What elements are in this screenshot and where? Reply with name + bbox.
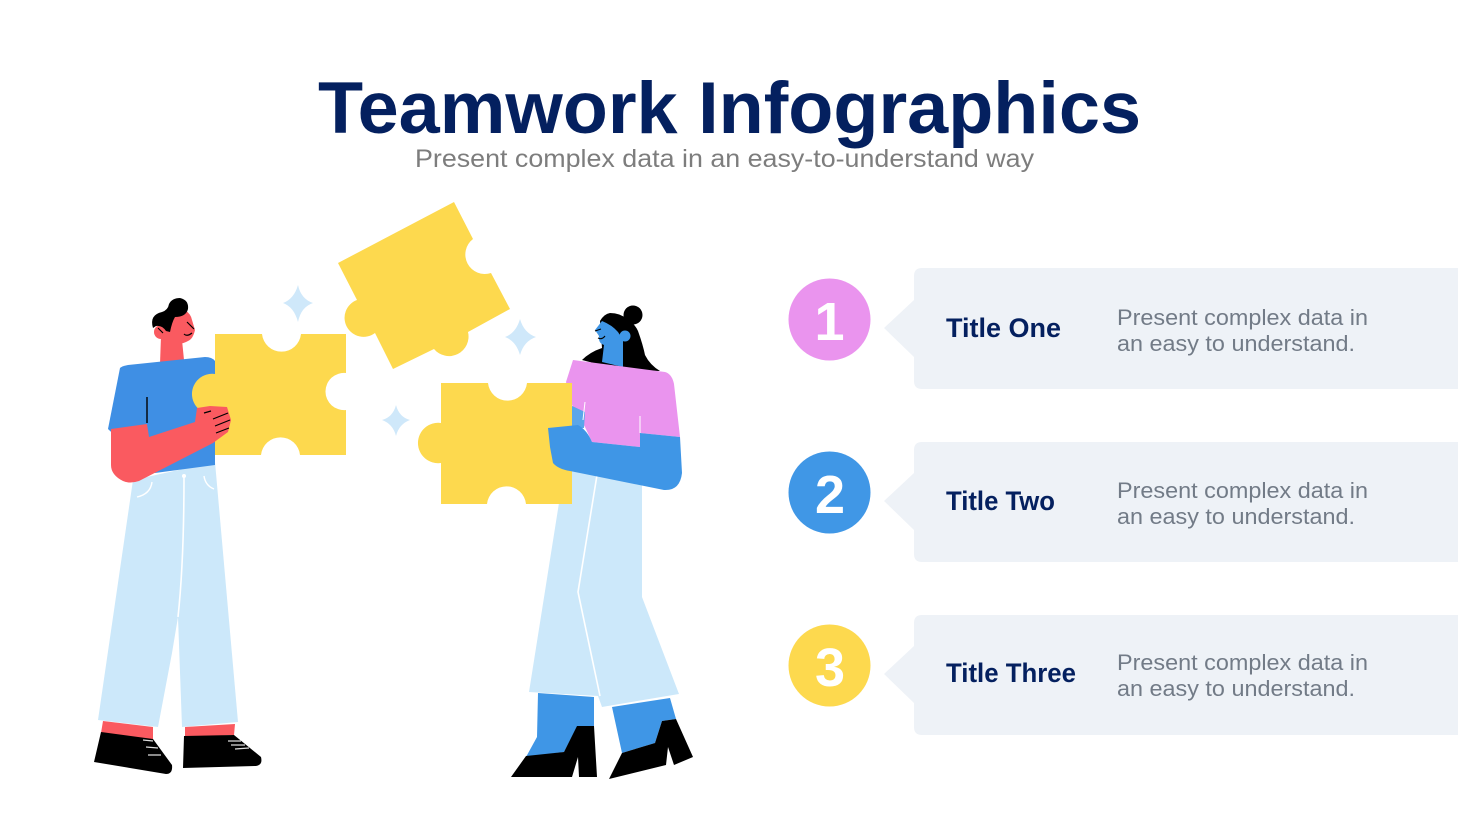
- man neck: [160, 336, 184, 364]
- description 2: Present complex data in: [1117, 478, 1368, 503]
- description 1: [1117, 305, 1368, 356]
- item 3: [788, 615, 1458, 735]
- man trousers: [98, 462, 238, 727]
- description 2: [1117, 478, 1368, 529]
- heading: title one: Title One: [946, 313, 1061, 343]
- description 2: an easy to understand.: [1117, 504, 1355, 529]
- woman arm and hand: [548, 425, 682, 490]
- woman heeled shoes: [511, 719, 693, 779]
- description 3: an easy to understand.: [1117, 676, 1355, 701]
- man socks: [101, 721, 235, 740]
- figure: woman: [511, 306, 693, 779]
- puzzle piece: held by man: [192, 334, 346, 455]
- man shoes: [94, 732, 261, 774]
- woman lower legs: [526, 693, 676, 757]
- puzzle piece: floating: [338, 202, 510, 369]
- woman shirt: [566, 360, 680, 447]
- illustration: teamwork puzzle: [94, 202, 693, 779]
- man shirt fold: [146, 397, 148, 423]
- number 3: 3: [815, 638, 845, 698]
- heading: title two: Title Two: [946, 486, 1055, 516]
- woman trousers: [529, 465, 679, 707]
- woman face details: [595, 329, 605, 339]
- man arm and hand: [111, 406, 231, 482]
- man head: [152, 298, 195, 344]
- heading: title three: Title Three: [946, 658, 1076, 688]
- icon: sparkles: [283, 285, 536, 436]
- description 1: Present complex data in: [1117, 305, 1368, 330]
- description 1: an easy to understand.: [1117, 331, 1355, 356]
- woman head and neck: [595, 321, 630, 367]
- woman hair: [582, 306, 660, 371]
- woman sleeve shadow: [570, 405, 585, 428]
- card 3: [884, 615, 1458, 735]
- badge 3: [788, 624, 870, 706]
- badge 2: [788, 452, 870, 534]
- item 2: [788, 442, 1458, 562]
- number 1: 1: [814, 292, 845, 352]
- figure: man: [94, 298, 261, 774]
- item 1: [788, 268, 1458, 389]
- card 1: [884, 268, 1458, 389]
- title: Teamwork Infographics: [318, 68, 1141, 149]
- subtitle: Present complex data in an easy-to-understand way: [415, 145, 1035, 173]
- man shirt: [108, 357, 215, 473]
- badge 1: [788, 278, 870, 360]
- puzzle piece: held by woman: [418, 383, 572, 504]
- number 2: 2: [815, 465, 845, 525]
- card 2: [884, 442, 1458, 562]
- description 3: [1117, 650, 1368, 701]
- description 3: Present complex data in: [1117, 650, 1368, 675]
